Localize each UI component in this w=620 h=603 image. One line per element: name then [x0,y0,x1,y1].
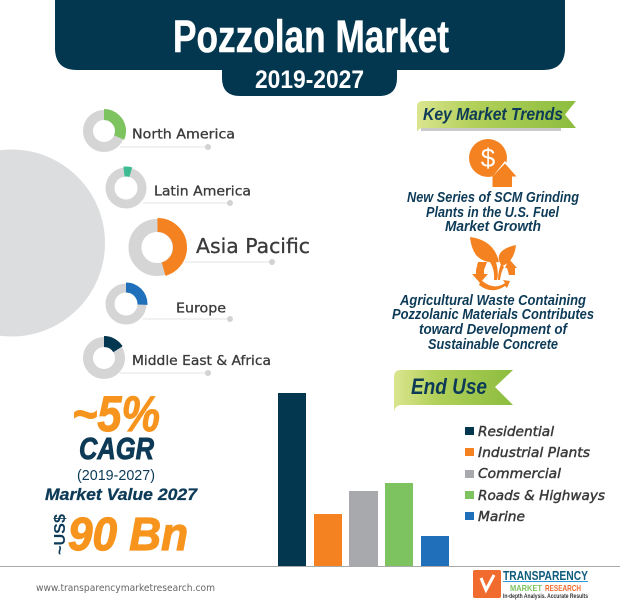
donut: Middle East and Africa: Middle East & Africa [132,353,271,369]
ribbon: End Use [394,370,513,411]
donut: Middle East and Africa [88,342,271,376]
donut: Europe: Europe [176,300,226,316]
trend text 1: Market Growth [445,219,541,235]
stat: CAGR [72,386,160,484]
trend text 1: Plants in the U.S. Fuel [426,205,560,221]
donut: Europe [110,288,233,322]
logo: MARKET [510,583,543,593]
donut: North America: North America [132,126,235,142]
trend text 1: New Series of SCM Grinding [407,190,579,206]
donut: North America [88,114,235,150]
legend: end use: Industrial Plants [478,445,590,461]
donut: Asia Pacific: Asia Pacific [196,234,310,258]
title: Pozzolan Market [173,11,449,62]
footer url: www.transparencymarketresearch.com [36,583,215,594]
legend: end use: Marine [478,509,525,525]
legend: end use: Roads & Highways [478,488,605,504]
donut: Latin America: Latin America [154,184,251,200]
stat: market value: ~US$ [52,514,69,555]
trend text 2: Sustainable Concrete [428,337,558,353]
bar chart: end use [278,393,449,566]
trend text 2 [392,293,594,353]
logo [473,569,589,600]
trend text 2: toward Development of [419,322,569,338]
icon: leaves with recycling arrows [470,237,517,290]
icon: dollar with up arrow [469,139,518,187]
trend text 1 [407,190,579,235]
trend text 2: Agricultural Waste Containing [399,293,586,309]
legend: end use: Residential [478,424,554,440]
legend: end use [465,424,605,525]
icon: dollar with up arrow: $ [481,143,496,173]
header banner [55,0,565,96]
trend text 2: Pozzolanic Materials Contributes [392,307,594,323]
ribbon: End Use: End Use [411,374,487,399]
logo: TRANSPARENCY [503,569,589,583]
legend: end use: Commercial [478,466,561,482]
ribbon: Key Market Trends: Key Market Trends [423,104,563,124]
ribbon: Key Market Trends [417,101,576,132]
logo: In-depth Analysis. Accurate Results [503,594,589,600]
donut: Latin America [108,170,251,206]
stat: market value: 90 Bn [68,508,188,560]
stat: market value: Market Value 2027 [45,485,199,504]
decorative large grey circle [0,150,105,336]
stat: market value [45,485,199,560]
stat: CAGR: (2019-2027) [77,467,155,484]
donut: Asia Pacific [135,225,310,270]
stat: CAGR: CAGR [79,431,154,466]
years: 2019-2027 [255,66,364,94]
stat: CAGR: ~5% [72,386,160,442]
logo: RESEARCH [545,583,581,593]
